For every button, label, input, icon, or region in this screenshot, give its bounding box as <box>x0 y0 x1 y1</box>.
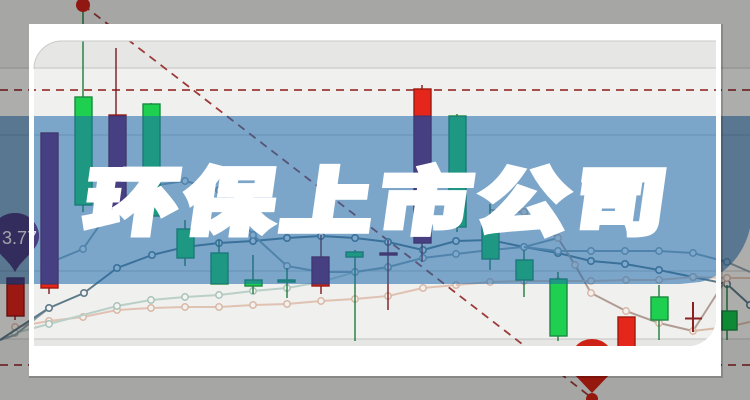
candle 2 <box>41 133 58 294</box>
candle 9 <box>278 268 295 298</box>
candle 21 <box>722 285 737 340</box>
candle 4 <box>109 48 126 215</box>
marker: left price balloon <box>0 213 39 272</box>
blue band <box>0 116 750 284</box>
red candles seen through the band <box>0 116 431 284</box>
title: 环 <box>79 144 186 250</box>
candle 7 <box>211 240 228 284</box>
balloon price label: 3.77 <box>2 228 37 248</box>
candle 10 <box>312 235 329 294</box>
candle 15 <box>482 204 499 270</box>
candle 20 <box>685 302 702 332</box>
marker: top red pin <box>76 0 90 12</box>
candle 11 <box>346 250 363 341</box>
candle 17 <box>550 272 567 341</box>
candle 6 <box>177 220 194 266</box>
candle 3 <box>75 8 92 212</box>
marker: bottom red balloon <box>570 339 614 400</box>
title <box>79 144 675 250</box>
title: 上 <box>275 144 382 250</box>
candle 14 <box>449 114 466 232</box>
candle 1 <box>7 278 24 320</box>
candle 16 <box>516 250 533 297</box>
candle 19 <box>651 285 668 340</box>
title: 司 <box>568 144 675 250</box>
moving average lines <box>0 181 750 340</box>
candle 5 <box>143 103 160 216</box>
title: 公 <box>471 144 578 250</box>
title: 保 <box>177 144 285 250</box>
candle 13 <box>414 85 431 262</box>
title: 市 <box>373 144 480 250</box>
candle 18 <box>618 317 635 349</box>
candle 8 <box>245 255 262 294</box>
candle 12 <box>380 240 397 310</box>
